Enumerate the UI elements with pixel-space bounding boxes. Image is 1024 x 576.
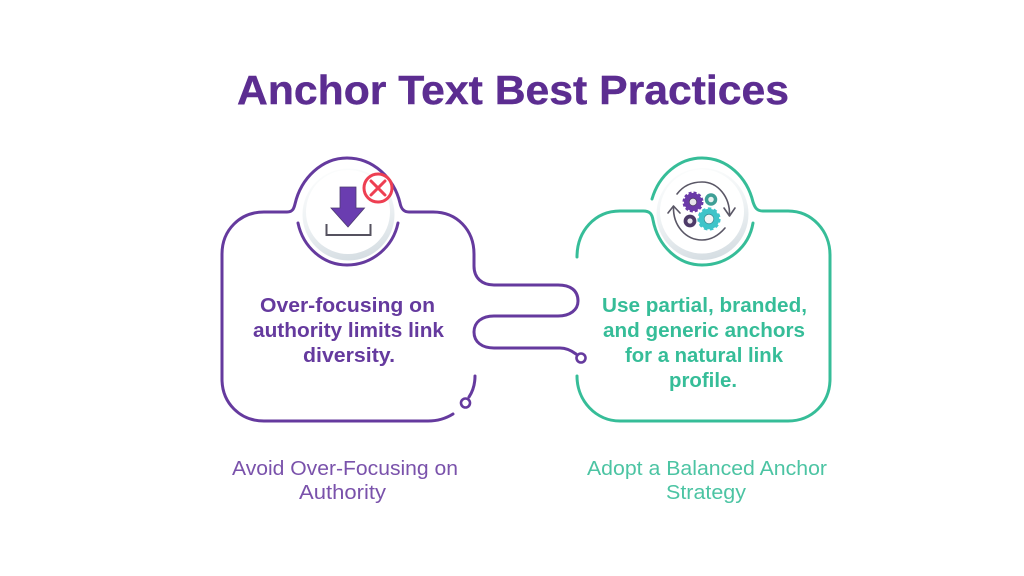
panel: avoid over-focusing on authority: [222, 158, 586, 504]
gear cyan: [698, 208, 720, 230]
caption: Adopt a Balanced Anchor: [587, 458, 827, 480]
gear teal: [706, 195, 716, 204]
description text: authority limits link: [253, 320, 445, 342]
icon ring: [302, 168, 394, 260]
caption: Strategy: [666, 482, 746, 504]
cycle arrows: [668, 182, 735, 240]
panel: adopt a balanced anchor strategy: [577, 158, 833, 504]
icon: download arrow: [326, 187, 370, 235]
icon ring: [656, 168, 748, 260]
panel outline: [577, 158, 830, 421]
gear dark: [686, 216, 694, 226]
icon: red cross: [364, 174, 392, 202]
title: Anchor Text Best Practices: [237, 67, 789, 113]
description text: and generic anchors: [603, 320, 805, 342]
description text: Over-focusing on: [260, 295, 435, 317]
panel outline and connector: [222, 158, 578, 421]
connector end node: [576, 354, 586, 362]
caption: Authority: [299, 482, 386, 504]
description text: diversity.: [303, 345, 395, 367]
caption: Avoid Over-Focusing on: [232, 458, 458, 480]
description text: profile.: [669, 370, 737, 392]
description text: for a natural link: [625, 345, 784, 367]
icon: gears with cycle arrows: [668, 182, 735, 240]
outline end node: [461, 398, 470, 408]
description text: Use partial, branded,: [602, 295, 807, 317]
gear purple: [684, 192, 702, 212]
